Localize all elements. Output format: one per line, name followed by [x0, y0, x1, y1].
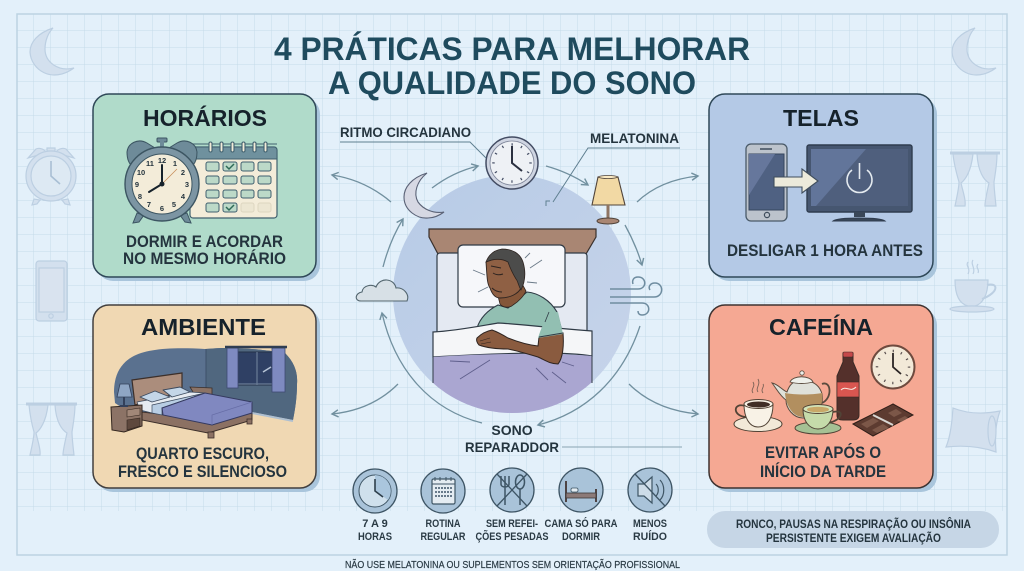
label: sono reparador: [465, 422, 682, 455]
panel: ambiente: [93, 305, 320, 492]
blanket: [433, 354, 592, 413]
tip: rotina regular: [420, 469, 466, 543]
blanket white fold: [433, 323, 592, 357]
heading: cafeína: CAFEÍNA: [769, 313, 873, 340]
label: sono reparador: SONO: [491, 422, 533, 438]
text: cafeína: [760, 443, 886, 481]
title: A QUALIDADE DO SONO: [328, 65, 696, 101]
icon: alarm clock: [125, 138, 199, 223]
callout: sinais de alerta: [707, 511, 999, 548]
tip: menos ruído: RUÍDO: [633, 530, 667, 543]
icon: wall clock: [872, 346, 914, 388]
decorative icons right: [946, 28, 1000, 452]
tip: menos ruído: [628, 468, 672, 543]
tip: cama só para dormir: CAMA SÓ PARA: [544, 517, 618, 530]
icon: moon: [404, 173, 444, 218]
icon: alarm clock: 2: [181, 168, 185, 177]
icon: coffee cup: [734, 379, 782, 432]
tip: 7 a 9 horas: HORAS: [358, 531, 392, 543]
icon: tea cup: [795, 404, 841, 434]
tip: menos ruído: MENOS: [633, 518, 667, 530]
text: ambiente: FRESCO E SILENCIOSO: [118, 462, 287, 481]
tip: rotina regular: REGULAR: [420, 531, 466, 543]
icon: chocolate: [853, 404, 913, 436]
icon: wind: [610, 277, 662, 315]
text: cafeína: EVITAR APÓS O: [765, 443, 881, 462]
tip: cama só para dormir: [544, 468, 618, 543]
text: horários: DORMIR E ACORDAR: [126, 232, 283, 251]
callout: sinais de alerta: PERSISTENTE EXIGEM AVALIAÇÃO: [766, 530, 941, 545]
label: ritmo circadiano: [340, 124, 486, 158]
text: telas: DESLIGAR 1 HORA ANTES: [727, 241, 923, 260]
tip: sem refeições pesadas: [476, 468, 548, 543]
bed headboard: [429, 229, 596, 254]
icon: cola bottle: [837, 352, 859, 420]
heading: ambiente: AMBIENTE: [141, 314, 266, 340]
tip: 7 a 9 horas: 7 A 9: [362, 518, 388, 530]
icon: alarm clock: 11: [146, 159, 154, 168]
icon: alarm clock: 6: [160, 204, 164, 213]
title: [274, 31, 750, 101]
tip: rotina regular: ROTINA: [426, 518, 461, 530]
title: 4 PRÁTICAS PARA MELHORAR: [274, 31, 750, 67]
label: sono reparador: REPARADDOR: [465, 439, 559, 455]
mattress: [437, 253, 587, 338]
tip: sem refeições pesadas: SEM REFEI-: [486, 518, 538, 530]
icon: calendar: [190, 142, 277, 218]
label: ritmo circadiano: RITMO CIRCADIANO: [340, 124, 471, 140]
callout: sinais de alerta: RONCO, PAUSAS NA RESPIRAÇÃO OU INSÔNIA: [736, 516, 971, 531]
label: melatonina: MELATONINA: [590, 130, 679, 146]
icon: arrow phone to tv: [774, 169, 818, 193]
icon: alarm clock: 8: [138, 192, 142, 201]
sleeping person: [433, 249, 592, 420]
background circle: [393, 175, 631, 413]
tip: 7 a 9 horas: [353, 469, 397, 543]
icon: alarm clock: 4: [181, 192, 186, 201]
panel: cafeína: [709, 305, 937, 492]
heading: horários: HORÁRIOS: [143, 104, 267, 131]
tip: cama só para dormir: DORMIR: [562, 531, 600, 543]
icon: alarm clock: 12: [158, 156, 166, 165]
decorative icons left: [26, 28, 77, 455]
arm: [477, 330, 563, 364]
text: ambiente: QUARTO ESCURO,: [136, 444, 269, 463]
text: ambiente: [118, 444, 287, 481]
icon: tv off: [807, 145, 912, 221]
text: horários: [123, 232, 286, 268]
icon: alarm clock: 9: [135, 180, 139, 189]
text: cafeína: INÍCIO DA TARDE: [760, 462, 886, 481]
panel: telas: [709, 94, 937, 281]
pillow: [458, 245, 565, 307]
icon: alarm clock: 1: [173, 159, 177, 168]
icon: phone: [746, 144, 787, 221]
text: horários: NO MESMO HORÁRIO: [123, 249, 286, 268]
heading: telas: TELAS: [783, 105, 859, 131]
icon: alarm clock: 10: [137, 168, 145, 177]
icon: cloud: [356, 280, 408, 301]
illustration: dark bedroom: [111, 347, 297, 438]
label: melatonina: [546, 130, 680, 206]
icon: teapot: [772, 371, 830, 418]
icon: alarm clock: 5: [172, 200, 176, 209]
icon: circadian clock: [486, 137, 538, 189]
cycle arrows: [332, 166, 698, 425]
panel: horários: [93, 94, 320, 281]
icon: lamp: [592, 176, 625, 224]
footer disclaimer: NÃO USE MELATONINA OU SUPLEMENTOS SEM ORIENTAÇÃO PROFISSIONAL: [345, 558, 680, 571]
icon: alarm clock: 3: [185, 180, 189, 189]
tip: sem refeições pesadas: ÇÕES PESADAS: [476, 530, 548, 543]
central sleep illustration: [393, 175, 631, 420]
icon: alarm clock: 7: [147, 200, 151, 209]
